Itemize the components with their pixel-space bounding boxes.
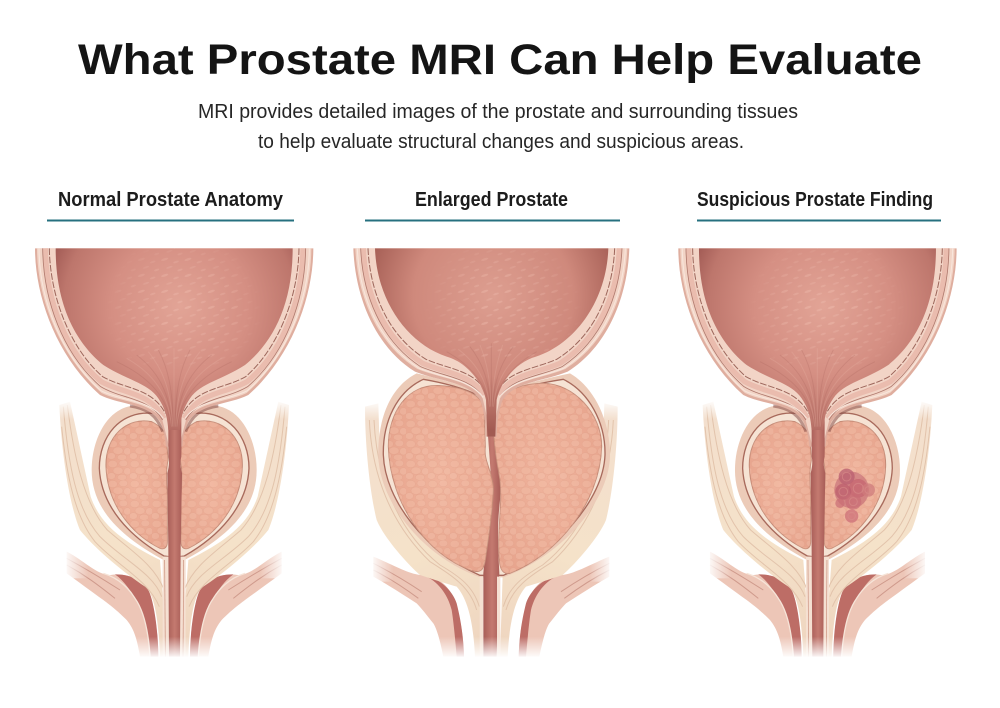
right lobe texture <box>493 383 602 573</box>
panel heading: enlarged prostate: Enlarged Prostate <box>415 189 568 211</box>
left side tissue bands <box>365 403 483 657</box>
bottom and side fades <box>360 399 627 658</box>
right lobe <box>493 383 602 573</box>
illustration: suspicious prostate finding <box>678 248 957 658</box>
subtitle: to help evaluate structural changes and suspicious areas. <box>258 131 744 153</box>
illustration: normal prostate <box>35 248 313 658</box>
panel heading: suspicious prostate finding: Suspicious Prostate Finding <box>697 189 933 211</box>
panel heading: normal prostate anatomy: Normal Prostate Anatomy <box>58 189 284 211</box>
urethra <box>483 397 501 657</box>
bladder cavity <box>375 248 608 437</box>
urethra borders <box>481 577 499 657</box>
suspicious lesion <box>834 469 875 523</box>
left lobe texture <box>388 386 493 572</box>
prostate capsule <box>378 373 610 577</box>
bladder neck folds <box>447 343 537 407</box>
left lobe <box>388 386 493 572</box>
illustration: enlarged prostate <box>353 248 629 658</box>
capsule inner ring <box>383 379 605 575</box>
title: What Prostate MRI Can Help Evaluate <box>78 36 922 84</box>
subtitle: MRI provides detailed images of the prostate and surrounding tissues <box>198 101 798 123</box>
bladder mucosa texture <box>448 254 558 356</box>
subtitle <box>198 101 798 153</box>
left bladder wall <box>353 248 491 437</box>
right bladder wall <box>491 248 629 437</box>
right side tissue bands <box>500 403 618 657</box>
